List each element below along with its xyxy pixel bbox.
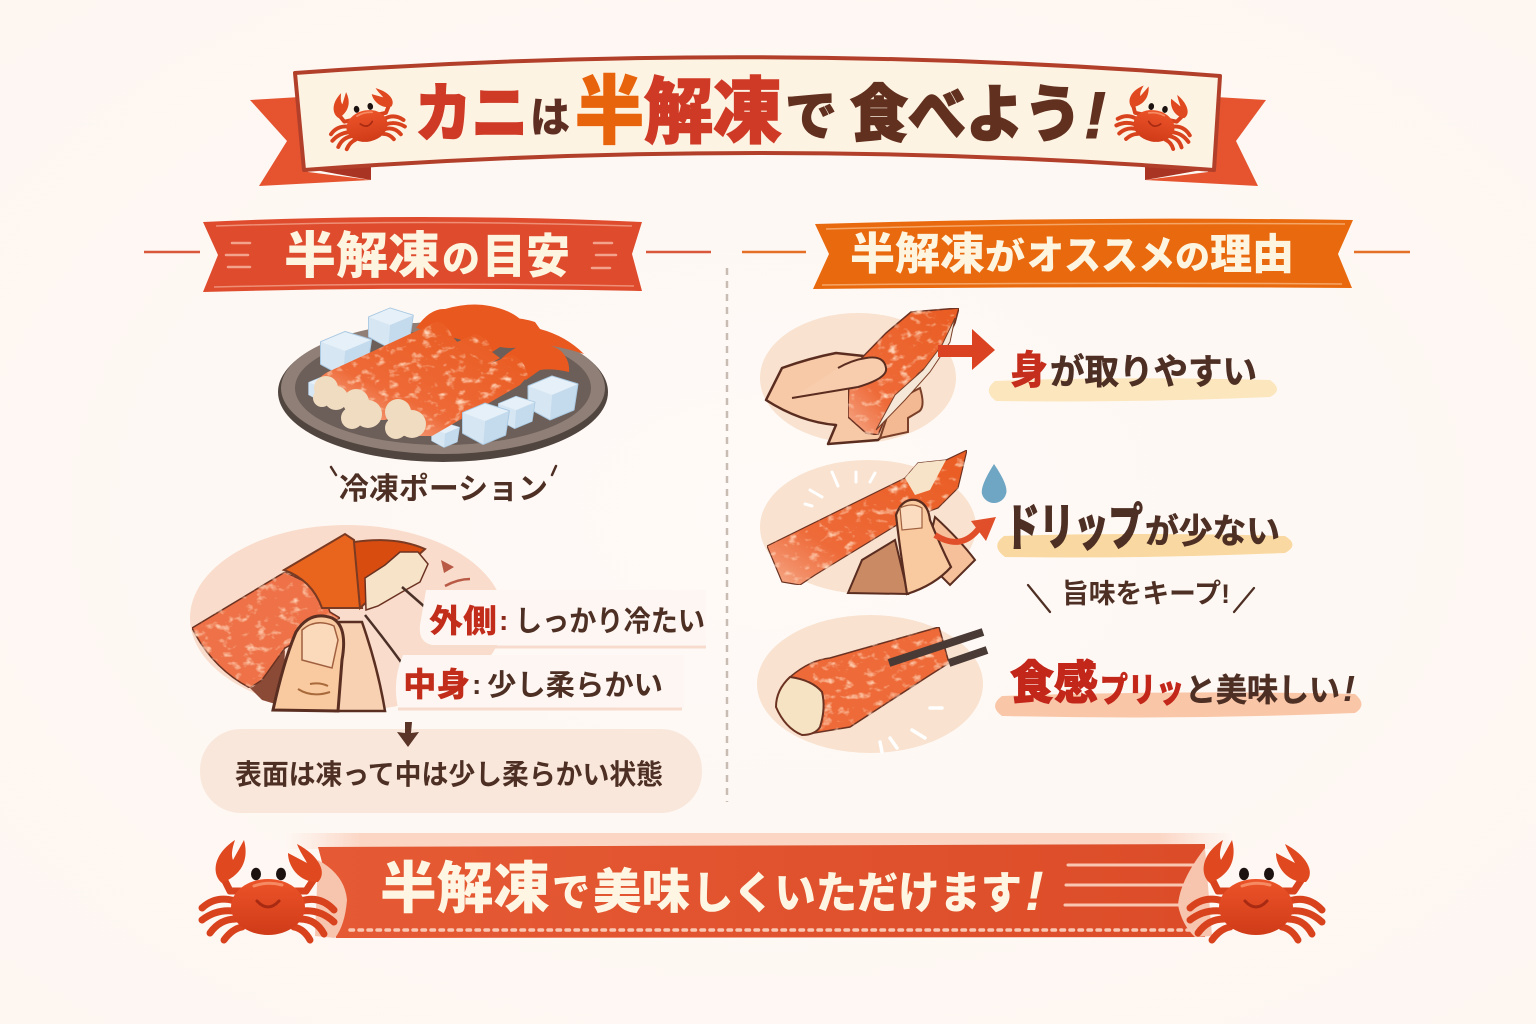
title text: 解凍 bbox=[644, 73, 782, 153]
text: little drip bbox=[997, 500, 1292, 558]
title text: 食べよう bbox=[850, 81, 1082, 150]
summary pill bbox=[200, 729, 702, 813]
heading: right section: の bbox=[1175, 239, 1210, 277]
label: inside slightly soft: 中身 bbox=[403, 666, 470, 703]
title text: ! bbox=[1084, 78, 1106, 152]
heading: right section: オススメ bbox=[1027, 234, 1175, 278]
crust under leg bbox=[250, 650, 285, 706]
illustration: meat pulls out easily bbox=[760, 308, 995, 444]
icon: left big crab bbox=[202, 840, 334, 940]
note: keep the umami bbox=[1028, 579, 1254, 612]
crab legs bbox=[316, 305, 584, 436]
exposed meat bbox=[313, 376, 426, 439]
ice cubes behind bbox=[309, 308, 459, 447]
summary pill: 表面は凍って中は少し柔らかい状態 bbox=[235, 759, 663, 790]
text: plump and delicious: と美味しい bbox=[1185, 672, 1340, 708]
note: keep the umami: 旨味をキープ! bbox=[1062, 579, 1230, 609]
footer text: 半解凍 bbox=[380, 857, 550, 920]
title banner bbox=[250, 57, 1266, 186]
footer text bbox=[380, 857, 1044, 922]
ribbon tails bbox=[250, 97, 1266, 186]
icon: right crab bbox=[1114, 82, 1198, 152]
text: plump and delicious: プリッ bbox=[1100, 672, 1184, 710]
footer text: しくいただけます bbox=[692, 869, 1022, 918]
label: outside stays cold: 外側 bbox=[429, 603, 497, 639]
footer text: で bbox=[552, 871, 590, 915]
illustration: little drip bbox=[760, 450, 1006, 594]
label: inside slightly soft bbox=[396, 655, 684, 709]
text: plump and delicious bbox=[995, 657, 1362, 717]
crab leg shell bbox=[192, 572, 340, 688]
fingers bbox=[273, 616, 385, 711]
broken joint bbox=[284, 534, 362, 608]
text: easy to remove meat: 身 bbox=[1010, 349, 1048, 393]
label: outside stays cold bbox=[420, 590, 706, 647]
pointer lines bbox=[365, 587, 426, 662]
label: outside stays cold: : bbox=[499, 605, 508, 636]
icon: left crab bbox=[323, 82, 407, 152]
heading: right section bbox=[742, 219, 1410, 289]
heading: right section: 理由 bbox=[1210, 231, 1294, 278]
illustration: close-up of half-thawed crab bbox=[190, 525, 504, 711]
heading: left section bbox=[144, 217, 711, 292]
heading: right section: が bbox=[985, 236, 1025, 277]
plate bbox=[278, 322, 608, 462]
decorative dots bbox=[350, 928, 1200, 932]
heading: left section: 半解凍 bbox=[284, 228, 440, 284]
ice cubes front bbox=[463, 376, 577, 444]
heading: left section: 目安 bbox=[482, 230, 570, 283]
label: inside slightly soft: 少し柔らかい bbox=[487, 669, 663, 702]
text: easy to remove meat bbox=[989, 349, 1277, 402]
label: inside slightly soft: : bbox=[472, 669, 481, 700]
sparkle marks bbox=[805, 472, 875, 506]
arrow: down to summary bbox=[397, 722, 419, 747]
footer banner bbox=[202, 833, 1322, 940]
label: outside stays cold: しっかり冷たい bbox=[515, 605, 705, 638]
text: plump and delicious: 食感 bbox=[1010, 657, 1098, 709]
title text: は bbox=[530, 94, 570, 141]
icon: water drop bbox=[982, 464, 1006, 503]
arrow: curved bbox=[935, 527, 980, 542]
illustration: plump texture with chopsticks bbox=[757, 615, 987, 753]
arrow: pull right bbox=[938, 329, 995, 370]
title text bbox=[415, 70, 1106, 153]
icon: right big crab bbox=[1190, 840, 1322, 940]
footer text: 美味 bbox=[593, 866, 690, 919]
title text: 半 bbox=[575, 70, 644, 153]
cream meat bbox=[365, 552, 428, 610]
title text: で bbox=[785, 87, 837, 147]
cream title plate bbox=[295, 57, 1220, 170]
heading: right section: 半解凍 bbox=[850, 230, 985, 279]
footer text: ! bbox=[1025, 859, 1044, 922]
title text: カニ bbox=[415, 78, 528, 150]
caption: frozen portion: 冷凍ポーション bbox=[339, 473, 548, 506]
heading: left section: の bbox=[442, 239, 480, 281]
illustration: frozen crab legs on plate bbox=[278, 305, 608, 462]
text: plump and delicious: ! bbox=[1343, 668, 1355, 709]
text: easy to remove meat: が取りやすい bbox=[1050, 353, 1257, 392]
text: little drip: が少ない bbox=[1145, 512, 1280, 551]
text: little drip: ドリップ bbox=[1005, 500, 1143, 556]
